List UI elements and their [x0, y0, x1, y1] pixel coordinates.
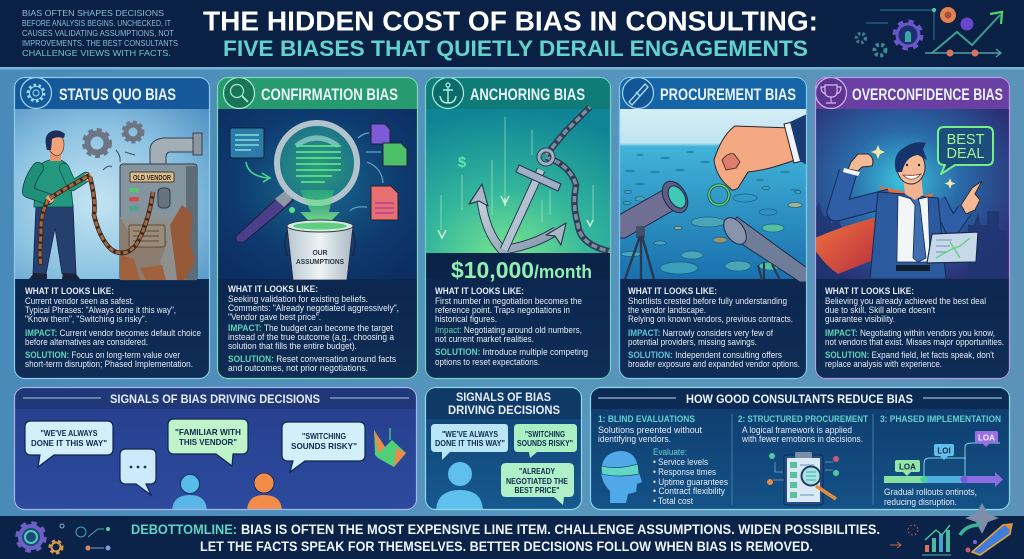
speech bubble: always done it this way — [431, 424, 508, 460]
card title: PROCUREMENT BIAS — [660, 85, 796, 104]
speech bubble: always done it this way: "WE'VE ALWAYS — [40, 428, 98, 438]
speech bubble: always done it this way: DONE IT THIS WAY" — [435, 438, 505, 448]
icon: colored shard — [374, 428, 406, 467]
speech bubble: already negotiated the best price: BEST PRICE" — [514, 485, 560, 495]
column: blind evaluations: 1: BLIND EVALUATIONS — [598, 414, 695, 425]
roadmap arrow with milestones — [884, 431, 1003, 487]
icons: gears and nodes — [18, 524, 110, 552]
illustration: anchor and chain with price tag: $ — [458, 154, 467, 171]
text: overconfidence details: WHAT IT LOOKS LIKE: — [825, 286, 914, 297]
column: structured procurement: A logical framework is applied — [742, 425, 852, 436]
text: confirmation details: Comments: "Already negotiated aggressively", — [228, 303, 399, 314]
text: confirmation details: "Vendor gave best price". — [228, 312, 321, 323]
column: structured procurement — [738, 414, 868, 505]
panel: procurement bias — [619, 77, 807, 379]
icon: blindfolded head — [601, 451, 642, 503]
text: overconfidence details — [825, 286, 1004, 370]
text: anchoring details: WHAT IT LOOKS LIKE: — [435, 286, 524, 297]
text: confirmation details: SOLUTION: Reset conversation around facts — [228, 354, 396, 365]
text: status quo details: Typical Phrases: "Always done it this way", — [25, 305, 176, 316]
text: status quo details: IMPACT: Current vendor becomes default choice — [25, 328, 201, 339]
illustration: confident businessman with cape and best deal bubble — [815, 109, 1010, 279]
panel: overconfidence bias — [815, 77, 1010, 379]
column: phased implementation: 3: PHASED IMPLEMENTATION — [880, 414, 1001, 425]
text: procurement details: WHAT IT LOOKS LIKE: — [628, 286, 717, 297]
icons: growth chart and rocket — [890, 503, 1012, 555]
bottom line statement: BIAS IS OFTEN THE MOST EXPENSIVE LINE ITEM. CHALLENGE ASSUMPTIONS. WIDEN POSSIBILITIES. — [241, 522, 880, 537]
column: structured procurement: 2: STRUCTURED PROCUREMENT — [738, 414, 868, 425]
intro text: IMPROVEMENTS. THE BEST CONSULTANTS — [22, 38, 178, 48]
text: status quo details: short-term disruption; Phased Implementation. — [25, 359, 193, 370]
speech bubble: switching sounds risky: "SWITCHING — [302, 431, 346, 441]
panel: how good consultants reduce bias — [590, 387, 1010, 510]
text: procurement details: the vendor landscape. — [628, 305, 706, 316]
panel: signals of bias, wide — [14, 387, 417, 512]
text: confirmation details — [228, 284, 399, 374]
card title: CONFIRMATION BIAS — [261, 85, 398, 104]
column: phased implementation — [880, 414, 1003, 508]
card title: ANCHORING BIAS — [470, 85, 585, 104]
panel: status quo bias — [14, 77, 210, 379]
card title: STATUS QUO BIAS — [59, 85, 176, 104]
text: status quo details: before alternatives are considered. — [25, 337, 148, 348]
text: procurement details: IMPACT: Narrowly considers very few of — [628, 328, 773, 339]
intro text: BIAS OFTEN SHAPES DECISIONS — [22, 8, 164, 18]
illustration: confident businessman with cape and best deal bubble: DEAL — [947, 146, 984, 162]
price label: $10,000 — [451, 257, 534, 283]
illustration: anchor and chain with price tag — [425, 107, 612, 254]
intro text — [22, 8, 178, 58]
roadmap arrow with milestones: LOA — [899, 462, 916, 472]
bottom banner — [0, 503, 1024, 559]
column: blind evaluations: • Response times — [653, 467, 716, 478]
text: anchoring details: reference point. Traps negotiations in — [435, 305, 570, 316]
header icons: gears and growth chart — [856, 7, 1002, 57]
speech bubble: always done it this way: DONE IT THIS WAY" — [31, 438, 107, 448]
speech bubble: familiar with this vendor — [168, 419, 248, 466]
price label: /month — [534, 262, 592, 282]
roadmap arrow with milestones: LOI — [937, 446, 951, 456]
column: blind evaluations: • Contract flexibility — [653, 486, 725, 497]
icon: clipboard with magnifier — [767, 452, 839, 505]
text: anchoring details: historical figures. — [435, 314, 497, 325]
speech bubble: always done it this way: "WE'VE ALWAYS — [442, 429, 498, 439]
text: status quo details: WHAT IT LOOKS LIKE: — [25, 286, 114, 297]
speech bubble: switching sounds risky: "SWITCHING — [525, 429, 565, 439]
speech bubble: switching sounds risky: SOUNDS RISKY" — [291, 441, 357, 451]
text: overconfidence details: SOLUTION: Expand field, let facts speak, don't — [825, 350, 994, 361]
illustration: magnifier, documents and assumptions bucket — [217, 109, 418, 280]
text: anchoring details: First number in negotiation becomes the — [435, 296, 582, 307]
illustration: man chained to old vendor machine: OLD VENDOR — [133, 173, 172, 182]
speech bubble: switching sounds risky — [282, 422, 365, 472]
speech bubble: ellipsis — [120, 449, 156, 495]
panel: anchoring bias — [425, 77, 612, 379]
text: overconfidence details: replace analysis with experience. — [825, 359, 942, 370]
panel: signals of bias, narrow — [425, 387, 582, 512]
icon: telescope — [622, 78, 654, 108]
illustration: magnifier, documents and assumptions bucket: OUR — [312, 248, 328, 257]
price label — [451, 260, 591, 282]
icon: magnifier — [224, 78, 254, 108]
heading: DRIVING DECISIONS — [448, 403, 560, 417]
intro text: CHALLENGE VIEWS WITH FACTS. — [22, 48, 171, 58]
heading — [448, 392, 560, 414]
text: overconfidence details: due to skill. Skill alone doesn't — [825, 305, 935, 316]
text: procurement details: potential providers, missing savings. — [628, 337, 757, 348]
title: THE HIDDEN COST OF BIAS IN CONSULTING: — [203, 6, 818, 36]
column: blind evaluations: Evaluate: — [653, 447, 687, 457]
panel: confirmation bias — [217, 77, 418, 379]
roadmap arrow with milestones: LOA — [978, 434, 995, 442]
column: blind evaluations: Solutions preented without — [598, 425, 702, 436]
bottom line statement: LET THE FACTS SPEAK FOR THEMSELVES. BETTER DECISIONS FOLLOW WHEN BIAS IS REMOVED. — [200, 539, 813, 554]
text: procurement details: Relying on known vendors, previous contracts. — [628, 314, 793, 325]
text: anchoring details: options to reset expectations. — [435, 357, 540, 368]
column: blind evaluations: • Service levels — [653, 457, 708, 468]
illustration: man chained to old vendor machine — [14, 109, 210, 280]
text: procurement details: Shortlists crested before fully understanding — [628, 296, 787, 307]
subtitle: FIVE BIASES THAT QUIETLY DERAIL ENGAGEMENTS — [223, 36, 808, 61]
text: anchoring details: Impact: Negotiating around old numbers, — [435, 325, 582, 336]
bottom line statement — [131, 522, 880, 554]
person: orange — [247, 473, 282, 512]
speech bubble: already negotiated the best price: NEGOTIATED THE — [506, 476, 568, 486]
speech bubble: familiar with this vendor: THIS VENDOR" — [179, 437, 237, 447]
text: confirmation details: instead of the true outcome (a.g., choosing a — [228, 332, 395, 343]
column: structured procurement: with fewer emotions in decisions. — [741, 434, 863, 445]
column: blind evaluations: • Uptime guarantees — [653, 477, 728, 488]
text: status quo details — [25, 286, 201, 370]
bottom line statement: DEBOTTOMLINE: — [131, 522, 237, 537]
text: status quo details: Current vendor seen as safest. — [25, 296, 134, 307]
text: confirmation details: WHAT IT LOOKS LIKE: — [228, 284, 318, 295]
heading: HOW GOOD CONSULTANTS REDUCE BIAS — [686, 392, 913, 406]
icon: trophy — [816, 78, 846, 108]
icon: gear — [20, 78, 52, 108]
text: overconfidence details: guarantee visibility. — [825, 314, 895, 325]
column: phased implementation: Gradual rollouts ontinots, — [884, 487, 977, 498]
heading: SIGNALS OF BIAS — [456, 390, 551, 404]
column: blind evaluations — [598, 414, 728, 507]
column: blind evaluations: • Total cost — [653, 496, 693, 507]
illustration: confident businessman with cape and best deal bubble: BEST — [947, 132, 985, 148]
illustration: hand picking a ring from a sea of options, telescopes — [619, 109, 807, 282]
text: confirmation details: Seeking validation for existing beliefs. — [228, 294, 368, 305]
text: overconfidence details: IMPACT: Negotiating within vendors you know, — [825, 328, 995, 339]
text: status quo details: SOLUTION: Focus on long-term value over — [25, 350, 180, 361]
heading: SIGNALS OF BIAS DRIVING DECISIONS — [110, 392, 320, 406]
speech bubble: switching sounds risky: SOUNDS RISKY" — [517, 438, 573, 448]
illustration: magnifier, documents and assumptions bucket: ASSUMPTIONS — [296, 257, 344, 266]
text: confirmation details: IMPACT: The budget can become the target — [228, 323, 393, 334]
speech bubble: switching sounds risky — [514, 424, 577, 458]
header band — [0, 0, 1024, 70]
icon: anchor — [432, 78, 464, 108]
text: status quo details: "Know them", "Switching is risky". — [25, 314, 147, 325]
speech bubble: always done it this way — [25, 421, 113, 467]
text: procurement details: broader exposure and expanded vendor options. — [628, 359, 800, 370]
person — [436, 462, 483, 512]
column: phased implementation: reducing disruption. — [884, 497, 957, 508]
text: anchoring details: not current market realities. — [435, 334, 534, 345]
intro text: BEFORE ANALYSIS BEGINS. UNCHECKED, IT — [22, 18, 171, 28]
speech bubble: familiar with this vendor: "FAMILIAR WITH — [175, 427, 241, 437]
person: blue — [172, 474, 207, 512]
intro text: CAUSES VALIDATING ASSUMPTIONS, NOT — [22, 28, 174, 38]
text: confirmation details: solution that fills the entire budget). — [228, 341, 357, 352]
text: overconfidence details: Believing you already achieved the best deal — [825, 296, 986, 307]
speech bubble: already negotiated the best price: "ALREADY — [519, 466, 555, 476]
text: anchoring details — [435, 286, 588, 368]
text: procurement details: SOLUTION: Independent consulting offers — [628, 350, 782, 361]
column: blind evaluations: identifying vendors. — [598, 434, 671, 445]
text: anchoring details: SOLUTION: Introduce multiple competing — [435, 347, 588, 358]
speech bubble: already negotiated the best price — [501, 463, 574, 505]
text: procurement details — [628, 286, 800, 370]
text: confirmation details: and outcomes, not prior negotiations. — [228, 363, 368, 374]
